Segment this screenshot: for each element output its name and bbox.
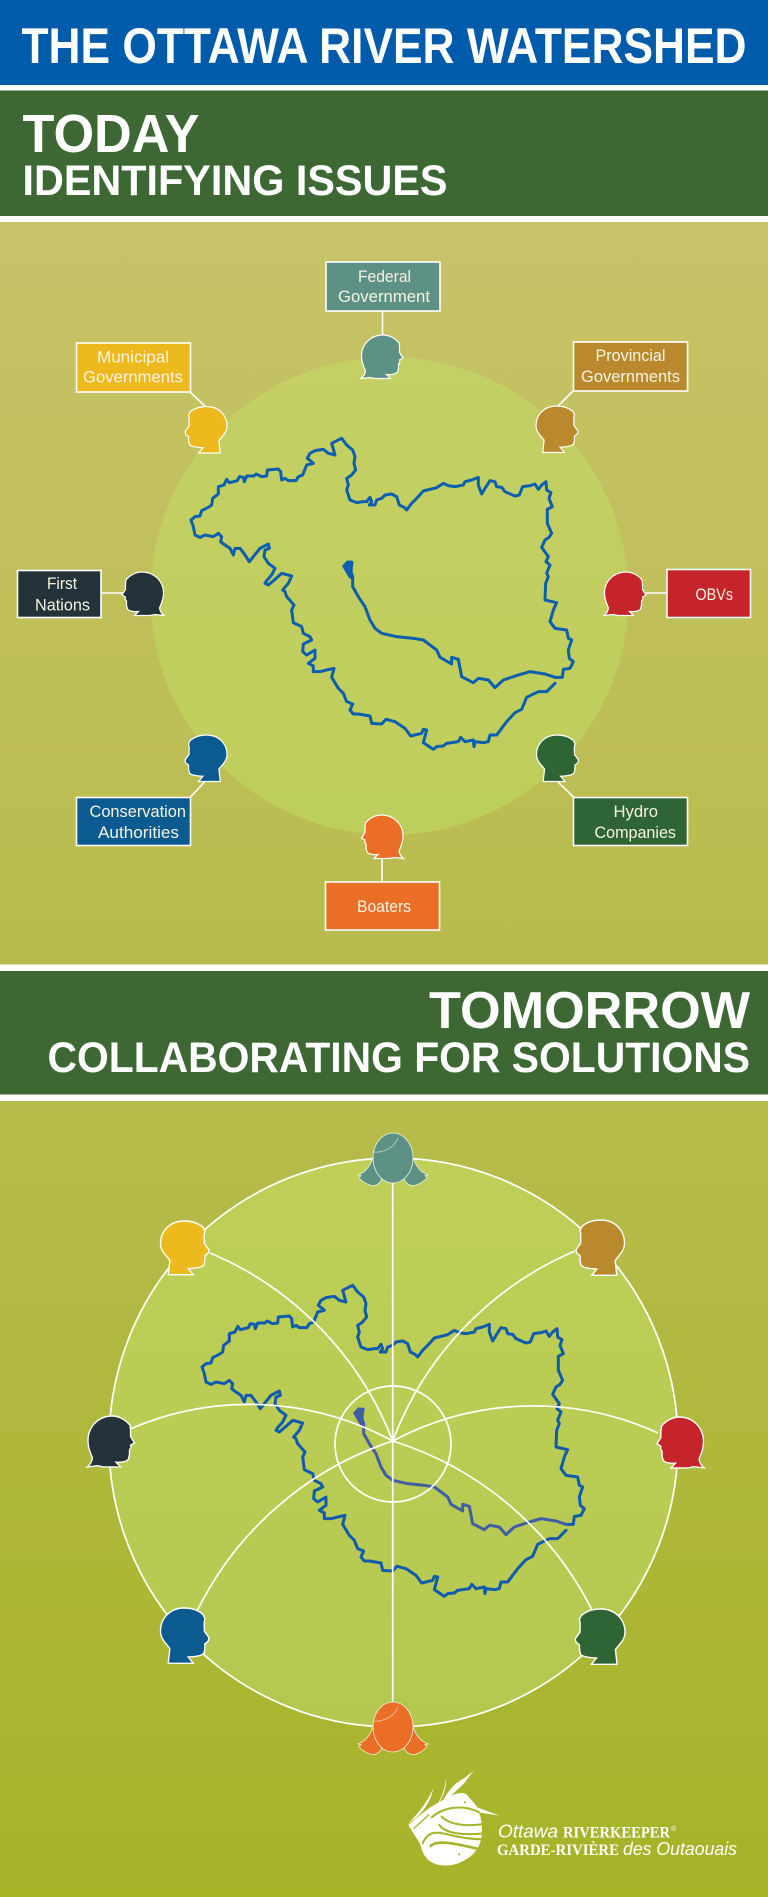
logo: ottawa riverkeeper: ® (671, 1825, 677, 1833)
stakeholder: boaters (326, 815, 440, 930)
head: hydro (575, 1609, 625, 1664)
stakeholder: first nations: First (47, 574, 77, 593)
stakeholder: municipal governments: Governments (83, 368, 183, 386)
heading: today identifying issues: TODAY (22, 104, 200, 164)
stakeholder: municipal governments (76, 343, 227, 453)
logo wordmark line two: GARDE-RIVIÈRE (497, 1840, 619, 1859)
logo mark: kingfisher, reeds and fish (408, 1771, 499, 1865)
head: conservation (160, 1608, 209, 1663)
heading: tomorrow collaborating for solutions: TOMORROW (429, 982, 751, 1040)
panel: today stakeholders around the watershed (0, 222, 768, 964)
head: obvs (657, 1417, 704, 1468)
watershed map outline and river (202, 1285, 584, 1596)
title banner (0, 0, 768, 85)
stakeholder: federal government (326, 262, 440, 378)
stakeholder: provincial governments: Governments (581, 367, 680, 386)
stakeholder: federal government: Government (338, 287, 430, 306)
stakeholder: first nations (18, 570, 164, 618)
stakeholder: conservation authorities: Authorities (98, 823, 179, 842)
stakeholder: hydro companies: Companies (594, 823, 676, 842)
head: federal (358, 1133, 428, 1186)
heading: today identifying issues (0, 90, 768, 216)
stakeholder: obvs: OBVs (696, 585, 733, 604)
stakeholder: provincial governments: Provincial (596, 346, 666, 365)
network lines linking every stakeholder (109, 1158, 678, 1727)
logo: ottawa riverkeeper: des Outaouais (623, 1838, 737, 1859)
stakeholder: provincial governments (536, 342, 688, 452)
logo: ottawa riverkeeper (408, 1771, 737, 1865)
stakeholder: conservation authorities (76, 735, 227, 846)
head: first nations (87, 1416, 134, 1467)
stakeholder: first nations: Nations (35, 596, 90, 614)
watershed backdrop circle (150, 357, 628, 835)
logo wordmark line one: Ottawa (498, 1820, 558, 1842)
shared circle (109, 1158, 678, 1727)
stakeholder: boaters: Boaters (357, 897, 411, 916)
stakeholder: federal government: Federal (358, 267, 411, 286)
head: municipal (160, 1221, 209, 1275)
stakeholder: hydro companies: Hydro (614, 802, 658, 821)
stakeholder: municipal governments: Municipal (97, 348, 169, 366)
heading: tomorrow collaborating for solutions (0, 971, 768, 1094)
stakeholder: conservation authorities: Conservation (90, 802, 186, 821)
heading: today identifying issues: IDENTIFYING ISSUES (22, 157, 448, 205)
head: provincial (576, 1220, 624, 1275)
watershed map outline and river (191, 438, 573, 749)
logo: ottawa riverkeeper: RIVERKEEPER (563, 1824, 670, 1842)
heading: tomorrow collaborating for solutions: COLLABORATING FOR SOLUTIONS (48, 1035, 750, 1082)
stakeholder: hydro companies (536, 735, 688, 846)
head: boaters (358, 1702, 428, 1755)
stakeholder: obvs (604, 570, 750, 618)
panel: tomorrow connected stakeholders (0, 1101, 768, 1897)
